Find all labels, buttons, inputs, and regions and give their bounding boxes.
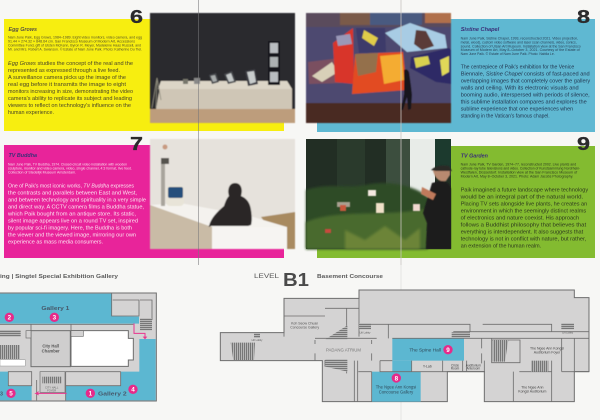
label: The Ngee Ann Kongsi Concourse Gallery: Concourse Gallery — [379, 389, 414, 394]
body text: Egg Grows: A surveillance camera picks up the image of the — [8, 75, 126, 81]
B1 label: B1 — [283, 270, 309, 290]
body text: Egg Grows: camera's ability to replicate its subject and leading — [8, 96, 132, 102]
heading: Sistine Chapel: Sistine Chapel — [461, 27, 500, 33]
photo: TV Buddha installation — [150, 139, 295, 249]
body text: Egg Grows: represented as expressed through a live feed. — [8, 68, 120, 74]
label: Padang Atrium: PADANG ATRIUM — [326, 347, 361, 352]
caption: TV Garden: cathode-ray tube televisions and video. Collection of Kunstsammlung Nordrhein- — [461, 166, 580, 170]
body text: TV Buddha: by popular sci-fi imagery. Here, the Buddha is both — [8, 226, 132, 232]
label: Lift Lobby — [252, 331, 574, 342]
marker 1: 1 — [89, 391, 93, 398]
label: Lift Lobby: Lift Lobby — [252, 339, 263, 342]
label: Auditorium: The Ngee Ann — [521, 386, 544, 390]
caption: TV Buddha — [8, 162, 132, 174]
body text: TV Garden: technology is not in conflict with nature, but rather, — [461, 236, 587, 242]
body text: TV Garden: of electronics and nature coexist. His approach — [461, 216, 579, 222]
panel: Egg Grows — [4, 19, 284, 131]
body text: Egg Grows — [8, 61, 133, 116]
floor plan: Singtel Special Exhibition Gallery — [0, 293, 156, 401]
label: Auditorium Foyer — [530, 346, 564, 354]
caption: Egg Grows — [8, 36, 142, 52]
marker 4: 4 — [131, 387, 135, 394]
caption: TV Buddha: Nam June Paik, TV Buddha, 1974. Closed-circuit video installation with wooden — [8, 162, 127, 166]
body text: TV Garden — [460, 188, 588, 250]
body text: TV Buddha: which Paik bought from an antique store. Its static, — [7, 212, 136, 218]
body text: TV Buddha: One of Paik's most iconic works, TV Buddha expresses — [8, 184, 134, 190]
caption: TV Garden — [461, 162, 580, 178]
City Hall foyer lifts — [40, 372, 65, 393]
label: Y-Lab: Y-Lab — [423, 365, 432, 369]
body text: TV Buddha: experience as mass media consumers. — [8, 240, 103, 246]
caption: Egg Grows: Mr. and Mrs. Robert A. Swanson. © Estate of Nam June Paik. Photo: Katherine Du Tiel. — [8, 48, 142, 52]
number 7: 7 — [130, 134, 143, 154]
caption: TV Buddha: sculpture, monitor and video camera, video, single channel, 4:3 format, live feed. — [8, 166, 132, 170]
body text: TV Garden: Placing TV sets alongside live plants, he creates an — [461, 202, 587, 208]
label: Koh Seow Chuan Concourse Gallery: Koh Seow Chuan — [291, 321, 318, 325]
marker 5 — [6, 389, 16, 398]
caption: Sistine Chapel: Nam June Paik. © Estate of Nam June Paik. Photo: Nabila Le. — [461, 52, 555, 56]
body text: Sistine Chapel: this sublime installation compares and explores the — [461, 100, 587, 106]
body text: TV Garden: would be an integral part of the natural world. — [460, 194, 584, 200]
photo: Sistine Chapel installation — [306, 13, 451, 123]
body text: Egg Grows: real egg before it transmits the image to eight — [8, 82, 126, 88]
body text: TV Garden: follows a Buddhist philosophy that believes that — [461, 222, 587, 228]
body text: Sistine Chapel: standing in the Vatican's famous chapel. — [461, 114, 550, 120]
marker 8 — [392, 373, 401, 383]
arrow: route to Gallery 2 — [134, 323, 145, 338]
caption: TV Garden: Modern Art, May 8–October 3, 2021. Photo: Adam Jacobs Photography. — [461, 174, 573, 178]
caption: Sistine Chapel: sound. Collection of Ulsan Art Museum. Installation view at the San Francisco — [461, 44, 581, 48]
marker 9: 9 — [446, 347, 450, 354]
label: Auditorium Anteroom: Anteroom — [466, 367, 481, 371]
marker 1 — [86, 389, 95, 398]
panel: Sistine Chapel — [317, 19, 595, 132]
caption: Egg Grows: 91.44 × 274.32 × 848.64 cm. San Francisco Museum of Modern Art, Accessions — [8, 40, 135, 44]
body text: Sistine Chapel: sublime experience that one experiences when — [461, 106, 573, 112]
label: Koh Seow Chuan Concourse Gallery: Concourse Gallery — [290, 326, 319, 330]
photo: TV Garden installation — [306, 139, 452, 249]
body text: TV Buddha: and direct way. A CCTV camera films a Buddha statue, — [8, 204, 144, 210]
marker 3 — [50, 313, 59, 322]
body text: TV Garden: Paik imagined a future landscape where technology — [461, 188, 588, 194]
marker 9 — [443, 345, 453, 354]
City Hall Chamber room: Chamber — [42, 349, 60, 354]
City Hall foyer lifts: CITY HALL — [45, 385, 59, 389]
caption: Egg Grows: Nam June Paik, Egg Grows, 1984–1989. Eight video monitors, video camera, and egg — [8, 36, 142, 40]
body text: Sistine Chapel: The centrepiece of Paik's exhibition for the Venice — [461, 64, 574, 70]
number 8: 8 — [577, 7, 590, 27]
caption: TV Buddha: Collection of Stedelijk Museum Amsterdam. — [8, 170, 76, 174]
heading: TV Buddha: TV Buddha — [8, 153, 37, 159]
body text: Sistine Chapel: overlapping images that completely cover the gallery — [461, 78, 590, 84]
label: Auditorium — [518, 386, 546, 394]
body text: Egg Grows: human experience. — [8, 110, 54, 116]
body text: Egg Grows: viewers to reflect on technology's influence on the — [8, 103, 131, 109]
label: Auditorium: Kongsi Auditorium — [518, 390, 546, 394]
floor plan: Basement Concourse — [220, 290, 589, 402]
marker 8: 8 — [395, 375, 399, 382]
label: Auditorium Anteroom — [466, 363, 481, 371]
caption: TV Garden: Westfalen, Düsseldorf. Installation view at the San Francisco Museum of — [461, 170, 577, 174]
fold lines — [198, 0, 401, 420]
arrowhead: Gallery 2 — [143, 337, 147, 339]
marker 4 — [128, 385, 138, 394]
heading: Singtel Special Exhibition Gallery: ing | Singtel Special Exhibition Gallery — [0, 274, 119, 280]
marker 3: 3 — [53, 315, 57, 322]
label: The Spine Hall: The Spine Hall — [409, 348, 441, 353]
body text: TV Garden: an extension of the human realm. — [461, 244, 542, 250]
body text: Sistine Chapel: booming audio, interspersed with periods of silence, — [461, 92, 590, 98]
panel: TV Garden — [317, 146, 595, 258]
number 6: 6 — [130, 7, 143, 27]
LEVEL label: LEVEL — [254, 274, 280, 280]
body text: TV Buddha — [7, 184, 146, 246]
marker 2 — [5, 313, 14, 322]
label: Auditorium Foyer: Auditorium Foyer — [534, 350, 561, 354]
label: Lift Lobby: Lift Lobby — [562, 331, 574, 334]
label: Auditorium Foyer: The Ngee Ann Kongsi — [530, 346, 564, 350]
body text: TV Garden: everything is interdependent. It also suggests that — [461, 230, 584, 236]
label: Koh Seow Chuan Concourse Gallery — [290, 321, 319, 330]
caption: Sistine Chapel: Nam June Paik, Sistine Chapel, 1993, reconstructed 2021. Video projection, — [461, 36, 578, 40]
label: Circle Room: Room — [451, 367, 460, 371]
label: The Ngee Ann Kongsi Concourse Gallery — [376, 385, 416, 394]
body text: TV Buddha: and between technology and spirituality in a very simple — [8, 198, 146, 204]
body text: Sistine Chapel: Biennale, Sistine Chapel consists of fast-paced and — [461, 72, 590, 78]
arrow: route along foyer — [36, 392, 67, 395]
caption: Sistine Chapel: metal, wood), custom video software and laser scan channels, video, sonics, — [461, 40, 577, 44]
body text: TV Buddha: silent image appears live on a round TV set, inspired — [8, 218, 138, 224]
panel: TV Buddha — [4, 145, 284, 258]
body text: TV Buddha: the contrasts and parallels between East and West, — [8, 190, 137, 196]
heading: Level B1 Basement Concourse — [254, 270, 384, 290]
marker 5: 5 — [9, 391, 13, 398]
photo: Egg Grows installation — [150, 13, 295, 123]
City Hall Chamber room — [31, 331, 70, 367]
label: Circle Room: Circle — [451, 363, 459, 367]
label: The Ngee Ann Kongsi Concourse Gallery: The Ngee Ann Kongsi — [376, 385, 416, 390]
caption: Sistine Chapel — [461, 36, 581, 56]
caption: TV Garden: Nam June Paik, TV Garden, 1974–77, reconstructed 2002. Live plants and — [461, 162, 576, 166]
number 9: 9 — [577, 134, 590, 154]
body text: TV Buddha: the viewer and the viewed image, mirroring our own — [8, 232, 136, 238]
body text: Sistine Chapel: walls and ceiling. With its electronic visuals and — [460, 86, 579, 92]
label: Gallery 2: Gallery 2 — [98, 391, 127, 397]
heading: Egg Grows: Egg Grows — [8, 27, 37, 33]
label: Gallery 1: Gallery 1 — [41, 306, 69, 312]
caption: Sistine Chapel: Museum of Modern Art, May 8–October 3, 2021. Courtesy of the Estate of — [461, 48, 580, 52]
marker 2: 2 — [8, 315, 12, 322]
partial label: 3 — [0, 391, 3, 397]
label: Auditorium Anteroom: Auditorium — [466, 363, 481, 367]
City Hall foyer lifts: FOYER — [47, 389, 56, 393]
body text: Sistine Chapel — [460, 64, 590, 120]
label: Circle Room — [451, 363, 460, 371]
caption: Egg Grows: Committee Fund, gift of Ulsten McKenn, Byron R. Meyer, Madeleine Haas Russell, and — [8, 44, 141, 48]
label: Lift Lobby: Lift Lobby — [360, 331, 371, 334]
City Hall Chamber room: City Hall — [42, 344, 59, 349]
heading: TV Garden: TV Garden — [461, 154, 489, 160]
Basement Concourse label: Basement Concourse — [317, 274, 384, 280]
body text: Egg Grows: Egg Grows studies the concept of the real and the — [8, 61, 133, 67]
body text: TV Garden: environment in which the seemingly distinct realms — [461, 208, 586, 214]
body text: Egg Grows: monitors increasing in size, demonstrating the video — [8, 89, 133, 95]
